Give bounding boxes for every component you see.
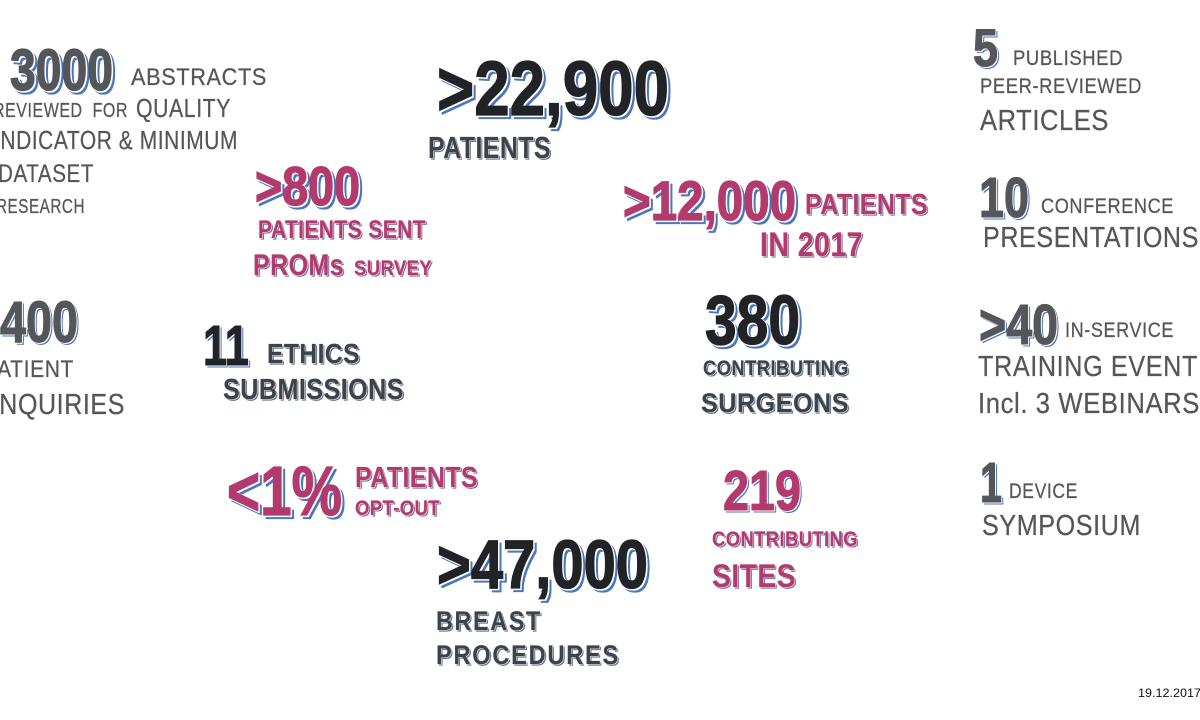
- number: 400: 400: [0, 290, 78, 355]
- stat: 3000 abstracts: [0, 38, 267, 218]
- number: 219: 219: [723, 459, 801, 523]
- text: survey: SURVEY: [354, 257, 432, 280]
- number: over 40: >40: [979, 293, 1058, 357]
- stat: 40 in-service training events: [978, 293, 1200, 420]
- number: over 47,000: >47,000: [437, 526, 648, 603]
- text: contributing: CONTRIBUTING: [703, 357, 849, 380]
- text: breast: BREAST: [436, 606, 542, 636]
- text: opt-out: OPT-OUT: [355, 497, 440, 520]
- stat: 800 patients sent PROMs survey: [253, 155, 432, 282]
- number: 11: 11: [203, 314, 249, 378]
- number: 380: 380: [705, 281, 800, 359]
- text: patients: PATIENTS: [355, 462, 478, 494]
- text: sites: SITES: [712, 558, 796, 594]
- stat: 22,900 patients: [428, 46, 669, 165]
- text: published: PUBLISHED: [1013, 47, 1123, 70]
- text: articles: ARTICLES: [980, 105, 1109, 137]
- text: quality: QUALITY: [136, 93, 231, 123]
- number: 10: 10: [979, 166, 1029, 230]
- number: 3000: 3000: [10, 38, 113, 103]
- stat: 380 contributing surgeons: [701, 281, 849, 418]
- text: surgeons: SURGEONS: [701, 388, 849, 418]
- text: device: DEVICE: [1009, 480, 1078, 503]
- number: 5: 5: [973, 19, 998, 78]
- text: submissions: SUBMISSIONS: [223, 374, 404, 406]
- text: indicator and minimum: INDICATOR & MINIMUM: [0, 125, 238, 155]
- number: over 22,900: >22,900: [437, 46, 669, 132]
- stat: 219 contributing sites: [712, 459, 858, 594]
- number: over 12,000: >12,000: [623, 169, 796, 232]
- number: 1: 1: [980, 451, 1002, 515]
- number: over 800: >800: [255, 155, 360, 217]
- text: patients sent: PATIENTS SENT: [258, 216, 426, 244]
- text: conference: CONFERENCE: [1041, 195, 1174, 218]
- text: symposium: SYMPOSIUM: [982, 510, 1141, 542]
- stat: under 1 percent opt-out: [227, 452, 478, 530]
- text: abstracts: ABSTRACTS: [131, 64, 267, 91]
- stat: 5 published articles: [973, 19, 1142, 137]
- text: procedures: PROCEDURES: [436, 640, 620, 670]
- date stamp: 19.12.2017: [1138, 686, 1200, 700]
- stat: 400 patient enquiries: [0, 290, 125, 421]
- text: contributing: CONTRIBUTING: [712, 528, 858, 551]
- text: ethics: ETHICS: [267, 338, 360, 369]
- text: patients: PATIENTS: [805, 189, 928, 221]
- text: PROMs: PROMs: [253, 249, 344, 282]
- text: peer-reviewed: PEER-REVIEWED: [980, 75, 1142, 98]
- stat: 47,000 breast procedures: [436, 526, 648, 670]
- stat: 11 ethics submissions: [203, 314, 404, 406]
- text: in 2017: IN 2017: [760, 226, 863, 264]
- stat: 1 device symposium: [980, 451, 1141, 542]
- text: dataset: DATASET: [0, 160, 94, 188]
- text: patients: PATIENTS: [428, 130, 551, 165]
- text: in-service: IN-SERVICE: [1065, 319, 1174, 342]
- number: under 1 percent: <1%: [227, 452, 342, 530]
- stat: 10 conference presentations: [979, 166, 1199, 254]
- stat: 12,000 patients in 2017: [623, 169, 928, 264]
